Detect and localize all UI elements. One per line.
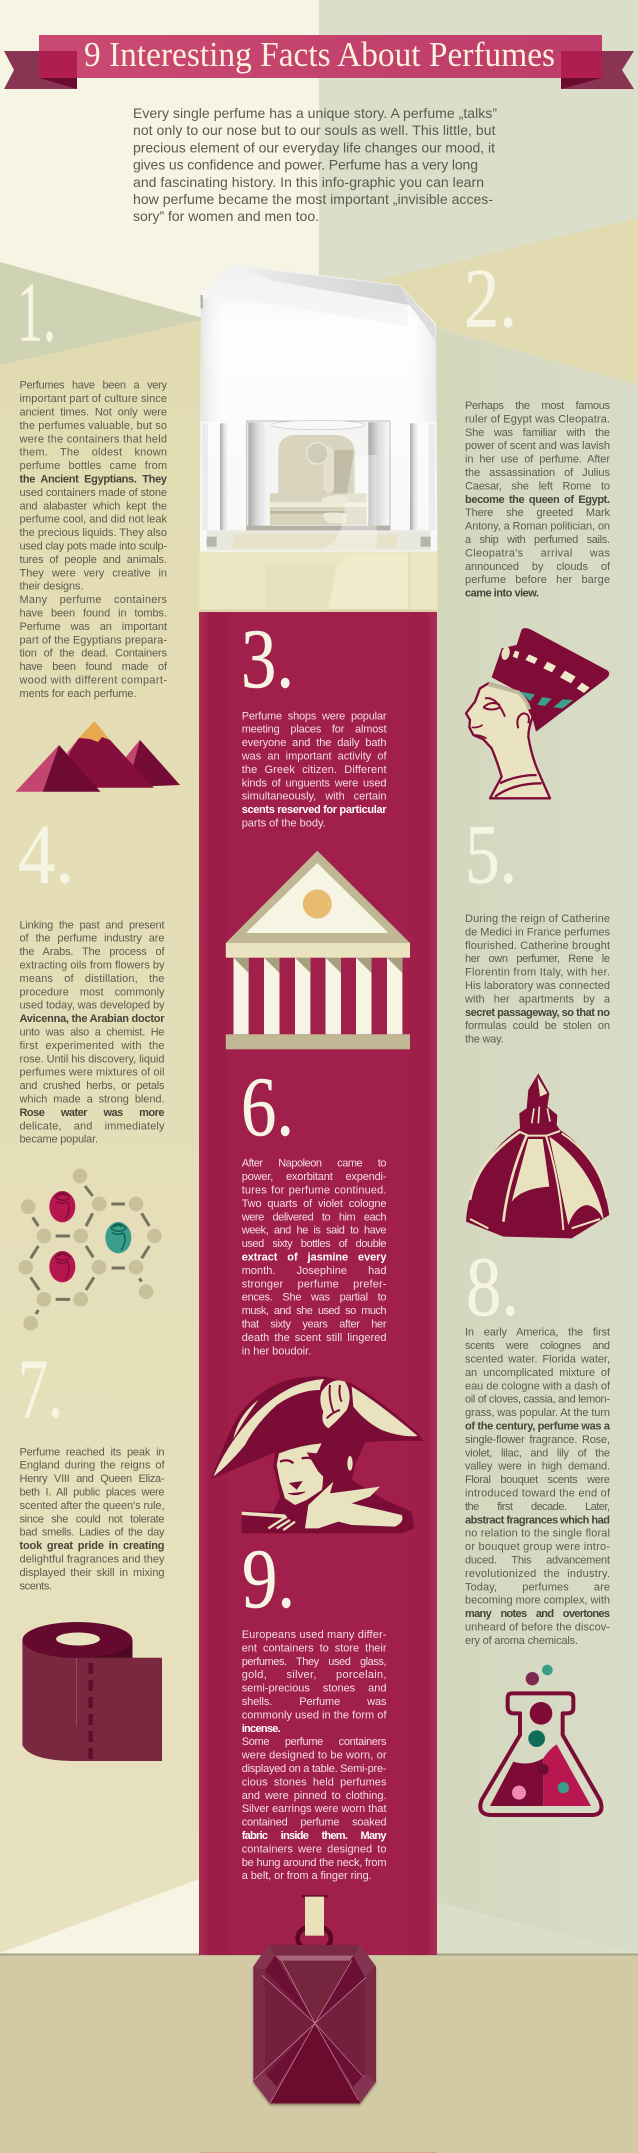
fact 3 number: 3. — [241, 612, 294, 706]
fact 1 text: them. The oldest known — [20, 447, 167, 459]
icon: cathedral dome — [466, 1073, 609, 1238]
icon: Napoleon portrait — [211, 1376, 423, 1533]
fact 1 text: Perfumes have been a very — [20, 380, 168, 392]
fact 4 number: 4. — [18, 808, 74, 902]
fact 8 text: duced. This advancement — [465, 1554, 610, 1566]
fact 4 text: the Arabs. The process of — [20, 946, 165, 958]
fact 9 text: commonly used in the form of — [242, 1709, 387, 1721]
fact 7 text: delightful fragrances and they — [20, 1554, 165, 1566]
intro paragraph: precious element of our everyday life changes our mood, it — [133, 139, 495, 155]
fact 7 text: since she could not tolerate — [20, 1513, 164, 1525]
rose: top crimson — [49, 1191, 75, 1222]
fact 8 text: scented water. Florida water, — [465, 1354, 610, 1366]
fact 2 text: Caesar, she left Rome to — [465, 480, 610, 492]
fact 4 text: became popular. — [20, 1134, 98, 1146]
fact 9 text: a belt, or from a finger ring. — [242, 1870, 372, 1882]
fact 8 text: Today, perfumes are — [465, 1581, 610, 1593]
fact 5 text: her own perfumer, Rene le — [465, 953, 610, 965]
fact 4 text: procedure most commonly — [20, 986, 165, 998]
icon: molecule with roses — [18, 1169, 162, 1331]
fact 6 text: in her boudoir. — [242, 1345, 311, 1357]
fact 8 text: an uncomplicated mixture of — [465, 1367, 611, 1379]
fact 2 text: perfume before her barge — [465, 574, 610, 586]
fact 8 text: the first decade. Later, — [465, 1501, 610, 1513]
fact 7 text: displayed their skill in mixing — [20, 1567, 164, 1579]
fact 1 text: ancient times. Not only were — [20, 406, 167, 418]
fact 1 text: Perfume was an important — [20, 621, 167, 633]
fact 1 text: the precious liquids. They also — [20, 527, 167, 539]
fact 2 text: become the queen of Egypt. — [465, 494, 610, 506]
icon: laboratory flask — [480, 1665, 601, 1815]
fact 7 text: took great pride in creating — [20, 1540, 164, 1552]
fact 2 text: announced by clouds of — [465, 561, 611, 573]
fact 6 text: used sixty bottles of double — [242, 1238, 386, 1250]
fact 8 text: no relation to the single floral — [465, 1528, 610, 1540]
fact 9 text: cious stones held perfumes — [242, 1776, 387, 1788]
fact 2 text: Perhaps the most famous — [465, 400, 610, 412]
fact 5 text: secret passageway, so that no — [465, 1007, 610, 1019]
rose: lower crimson — [49, 1251, 75, 1282]
fact 8 text: ery of aroma chemicals. — [465, 1635, 578, 1647]
fact 4 text: extracting oils from flowers by — [20, 960, 165, 972]
intro paragraph — [133, 105, 497, 224]
fact 4 text: perfumes were mixtures of oil — [20, 1067, 164, 1079]
fact 8 text: eau de cologne with a dash of — [465, 1380, 611, 1392]
fact 9 text: containers were designed to — [242, 1843, 386, 1855]
fact 4 text: of the perfume industry are — [20, 933, 164, 945]
fact 9 text: perfumes. They used glass, — [242, 1656, 386, 1668]
fact 1 text: perfume cool, and did not leak — [20, 514, 168, 526]
fact 2 text: Antony, a Roman politician, on — [465, 521, 610, 533]
fact 7 text: beth I. All public places were — [20, 1486, 164, 1498]
icon: Nefertiti bust — [466, 628, 612, 798]
fact 6 text: death the scent still lingered — [242, 1332, 386, 1344]
fact 5 text: the way. — [465, 1034, 504, 1046]
fact 2 text: in her use of perfume. After — [465, 454, 610, 466]
fact 6 number: 6. — [241, 1060, 294, 1154]
intro paragraph: Every single perfume has a unique story. A perfume „talks” — [133, 105, 497, 121]
fact 4 text: which made a strong blend. — [18, 1094, 164, 1106]
fact 8 text: introduced toward the end of — [465, 1488, 611, 1500]
fact 3 text: meeting places for almost — [242, 724, 386, 736]
fact 8 text: revolutionized the industry. — [465, 1568, 610, 1580]
fact 4 text: means of distillation, the — [20, 973, 164, 985]
fact 9 text: be hung around the neck, from — [242, 1857, 386, 1869]
fact 6 text: ences. She was partial to — [242, 1292, 386, 1304]
fact 1 text: tures of people and animals. — [20, 554, 167, 566]
fact 8 text: Floral bouquet scents were — [465, 1474, 610, 1486]
fact 3 text: the Greek citizen. Different — [242, 764, 386, 776]
intro paragraph: not only to our nose but to our souls as well. This little, but — [133, 122, 496, 138]
fact 6 text: After Napoleon came to — [242, 1158, 386, 1170]
fact 7 text: Henry VIII and Queen Eliza- — [20, 1473, 165, 1485]
perfume bottle body — [199, 265, 437, 1955]
fact 9 text: and were pinned to clothing. — [242, 1790, 386, 1802]
fact 1 text: part of the Egyptians prepara- — [20, 634, 167, 646]
fact 8 text: single-flower fragrance. Rose, — [465, 1434, 610, 1446]
fact 1 text: important part of culture since — [20, 393, 167, 405]
fact 2 text: came into view. — [465, 588, 539, 600]
fact 8 text: becoming more complex, with — [465, 1595, 610, 1607]
icon: fabric roll — [22, 1622, 162, 1761]
fact 5 text: Florentin from Italy, with her. — [465, 967, 610, 979]
fact 4 text: Avicenna, the Arabian doctor — [20, 1013, 165, 1025]
fact 7 number: 7. — [18, 1342, 63, 1436]
fact 9 text: semi-precious stones and — [242, 1683, 386, 1695]
fact 4 text: and crushed herbs, or petals — [20, 1080, 165, 1092]
fact 5 text: flourished. Catherine brought — [465, 940, 610, 952]
fact 5 number: 5. — [465, 808, 517, 902]
fact 5 text: with her apartments by a — [464, 993, 611, 1005]
fact 8 text: scents were colognes and — [465, 1340, 610, 1352]
fact 3 text — [241, 710, 387, 830]
fact 8 number: 8. — [466, 1240, 519, 1334]
fact 1 text: used containers made of stone — [20, 487, 167, 499]
fact 9 text: Silver earrings were worn that — [242, 1803, 386, 1815]
fact 2 number: 2. — [464, 252, 517, 346]
fact 2 text: power of scent and was lavish — [465, 440, 610, 452]
fact 1 text: wood with different compart- — [18, 674, 167, 686]
fact 1 text: have been found made of — [20, 661, 168, 673]
fact 1 text: and alabaster which kept the — [20, 500, 167, 512]
fact 7 text — [20, 1446, 165, 1592]
icon: pyramids — [16, 721, 180, 792]
fact 3 text: everyone and the daily bath — [242, 737, 386, 749]
intro paragraph: how perfume became the most important „invisible acces- — [133, 191, 493, 207]
fact 9 text — [241, 1629, 387, 1882]
fact 3 text: scents reserved for particular — [242, 804, 387, 816]
icon: greek temple — [226, 851, 410, 1049]
fact 3 text: was an important activity of — [241, 750, 387, 762]
bottle collar — [199, 552, 437, 612]
fact 8 text: unheard of before the discov- — [465, 1622, 610, 1634]
fact 7 text: bad smells. Ladies of the day — [20, 1527, 165, 1539]
intro paragraph: and fascinating history. In this info-graphic you can learn — [133, 174, 484, 190]
fact 1 text: used clay pots made into sculp- — [20, 540, 167, 552]
fact 7 text: scented after the queen's rule, — [20, 1500, 164, 1512]
fact 9 text: fabric inside them. Many — [242, 1830, 387, 1842]
fact 9 text: Europeans used many differ- — [242, 1629, 387, 1641]
fact 4 text: delicate, and immediately — [20, 1120, 165, 1132]
title ribbon — [4, 35, 634, 89]
pendant gem — [253, 1895, 376, 2105]
fact 9 text: were designed to be worn, or — [241, 1750, 387, 1762]
fact 9 text: displayed on a table. Semi-pre- — [242, 1763, 387, 1775]
fact 1 text: the Ancient Egyptians. They — [20, 474, 168, 486]
fact 5 text: formulas could be stolen on — [465, 1020, 610, 1032]
fact 1 text — [18, 380, 168, 700]
bottle glass cap — [199, 265, 437, 612]
fact 8 text: many notes and overtones — [465, 1608, 610, 1620]
fact 9 text: ent containers to store their — [242, 1642, 387, 1654]
fact 2 text: the assassination of Julius — [465, 467, 610, 479]
fact 6 text: that sixty years after her — [242, 1318, 387, 1330]
fact 6 text: were delivered to him each — [241, 1211, 386, 1223]
fact 8 text: In early America, the first — [465, 1327, 610, 1339]
fact 9 number: 9. — [242, 1532, 295, 1626]
fact 2 text: Cleopatra's arrival was — [465, 547, 610, 559]
fact 2 text — [465, 400, 611, 600]
fact 2 text: ruler of Egypt was Cleopatra. — [465, 413, 610, 425]
fact 3 text: simultaneously, with certain — [242, 791, 386, 803]
fact 8 text: abstract fragrances which had — [465, 1514, 610, 1526]
fact 1 text: ments for each perfume. — [20, 688, 136, 700]
fact 1 text: perfume bottles came from — [20, 460, 167, 472]
fact 1 text: Many perfume containers — [20, 594, 168, 606]
fact 6 text: month. Josephine had — [242, 1265, 386, 1277]
fact 1 text: tion of the dead. Containers — [20, 648, 168, 660]
fact 3 text: Perfume shops were popular — [242, 710, 387, 722]
fact 2 text: She was familiar with the — [465, 427, 610, 439]
fact 1 text: were the containers that held — [18, 433, 167, 445]
fact 7 text: scents. — [20, 1580, 52, 1592]
fact 8 text: or bouquet group were intro- — [465, 1541, 610, 1553]
intro paragraph: sory” for women and men too. — [133, 208, 319, 224]
fact 4 text: Linking the past and present — [20, 919, 164, 931]
fact 2 text: a ship with perfumed sails. — [465, 534, 610, 546]
fact 3 text: kinds of unguents were used — [242, 777, 386, 789]
title: 9 Interesting Facts About Perfumes — [84, 35, 555, 74]
fact 6 text: week, and he is said to have — [241, 1225, 386, 1237]
fact 1 number: 1. — [17, 266, 56, 360]
fact 8 text — [465, 1327, 611, 1647]
fact 5 text: During the reign of Catherine — [465, 913, 610, 925]
fact 8 text: of the century, perfume was a — [465, 1420, 611, 1432]
fact 6 text: Two quarts of violet cologne — [242, 1198, 386, 1210]
fact 1 text: have been found in tombs. — [20, 608, 167, 620]
fact 8 text: violet, lilac, and lily of the — [465, 1447, 610, 1459]
fact 8 text: valley were in high demand. — [465, 1461, 610, 1473]
fact 4 text: used today, was developed by — [20, 1000, 165, 1012]
fact 6 text — [241, 1158, 387, 1357]
fact 4 text: rose. Until his discovery, liquid — [20, 1053, 164, 1065]
fact 9 text: contained perfume soaked — [242, 1817, 386, 1829]
fact 1 text: They were very creative in — [20, 567, 167, 579]
fact 6 text: extract of jasmine every — [242, 1252, 387, 1264]
fact 4 text — [18, 919, 165, 1146]
fact 6 text: tures for perfume continued. — [242, 1184, 386, 1196]
fact 1 text: their designs. — [20, 581, 84, 593]
fact 5 text: His laboratory was connected — [465, 980, 610, 992]
fact 6 text: stronger perfume prefer- — [242, 1278, 387, 1290]
intro paragraph: gives us confidence and power. Perfume has a very long — [133, 157, 478, 173]
fact 3 text: parts of the body. — [242, 818, 326, 830]
fact 4 text: unto was also a chemist. He — [20, 1026, 164, 1038]
fact 5 text — [464, 913, 611, 1046]
fact 4 text: first experimented with the — [20, 1040, 164, 1052]
rose: teal — [105, 1222, 131, 1253]
fact 1 text: the perfumes valuable, but so — [20, 420, 167, 432]
fact 6 text: musk, and she used so much — [242, 1305, 386, 1317]
fact 4 text: Rose water was more — [20, 1107, 164, 1119]
fact 8 text: oil of cloves, cassia, and lemon- — [465, 1394, 610, 1406]
fact 8 text: grass, was popular. At the turn — [465, 1407, 610, 1419]
fact 9 text: incense. — [242, 1723, 281, 1735]
fact 2 text: There she greeted Mark — [465, 507, 610, 519]
fact 7 text: England during the reigns of — [20, 1460, 165, 1472]
fact 9 text: Some perfume containers — [242, 1736, 387, 1748]
fact 7 text: Perfume reached its peak in — [20, 1446, 164, 1458]
fact 9 text: gold, silver, porcelain, — [242, 1669, 386, 1681]
fact 6 text: power, exorbitant expendi- — [242, 1171, 387, 1183]
fact 9 text: shells. Perfume was — [242, 1696, 387, 1708]
fact 5 text: de Medici in France perfumes — [465, 926, 610, 938]
